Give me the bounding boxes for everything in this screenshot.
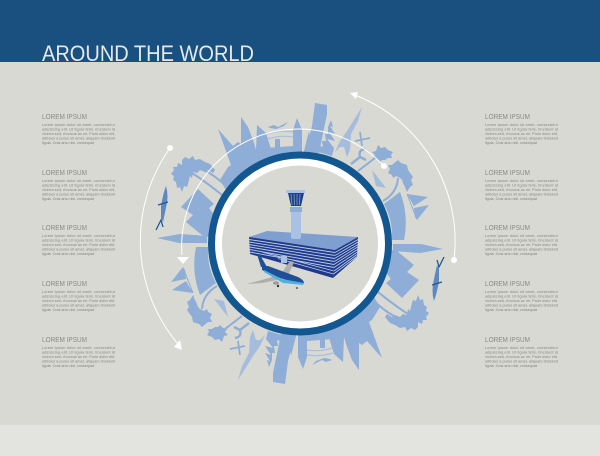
left text block 1: Lorem ipsum dolor sit amet, consectetur — [42, 123, 116, 127]
fuselage stripe — [264, 270, 304, 285]
left text block 4: ultricies a purus sit amet, aliquam tincidunt — [42, 304, 116, 308]
west needle tower — [157, 234, 207, 243]
spires — [218, 117, 273, 190]
left text block 3: adipiscing elit. Ut ligula felis, tincidunt id — [42, 238, 115, 242]
palm trees right — [372, 145, 413, 201]
right text block 2: adipiscing elit. Ut ligula felis, tincidunt id — [485, 184, 558, 188]
right text block 1: ultricies a purus sit amet, aliquam tincidunt — [485, 136, 559, 140]
right text block 2: Lorem ipsum dolor sit amet, consectetur — [485, 179, 559, 183]
right text block 4: ultricies a purus sit amet, aliquam tincidunt — [485, 304, 559, 308]
left text block 5: ultricies a purus sit amet, aliquam tincidunt — [42, 360, 116, 364]
right text block 1 — [485, 114, 559, 145]
airport terminal — [249, 190, 358, 278]
right text block 5: viverra sed, rhoncus ac mi. Proin dolor elit, — [485, 355, 558, 359]
fuselage — [262, 266, 304, 284]
small sailboat — [372, 170, 386, 188]
left text block 5: LOREM IPSUM — [42, 337, 87, 344]
nose gear — [296, 287, 298, 289]
left text block 1: viverra sed, rhoncus ac mi. Proin dolor elit, — [42, 132, 115, 136]
left text block 2: ultricies a purus sit amet, aliquam tincidunt — [42, 192, 116, 196]
right text block 5: ligula. Cras arcu nisl, consequat — [485, 364, 538, 368]
right text block 2: ligula. Cras arcu nisl, consequat — [485, 197, 538, 201]
eiffel tower — [335, 107, 362, 157]
left text block 3: Lorem ipsum dolor sit amet, consectetur — [42, 234, 116, 238]
right text block 3: viverra sed, rhoncus ac mi. Proin dolor elit, — [485, 243, 558, 247]
right text block 1: ligula. Cras arcu nisl, consequat — [485, 141, 538, 145]
control tower — [286, 190, 305, 239]
right text block 2: ultricies a purus sit amet, aliquam tincidunt — [485, 192, 559, 196]
small plane right — [432, 257, 444, 301]
left text block 4: Lorem ipsum dolor sit amet, consectetur — [42, 290, 116, 294]
spike tower — [303, 131, 312, 155]
left text block 1: ligula. Cras arcu nisl, consequat — [42, 141, 95, 145]
footer band — [0, 425, 600, 456]
windmill — [355, 132, 370, 146]
right text block 2: LOREM IPSUM — [485, 170, 530, 177]
right text block 5: LOREM IPSUM — [485, 337, 530, 344]
small plane left — [156, 186, 168, 230]
left text block 2: viverra sed, rhoncus ac mi. Proin dolor elit, — [42, 188, 115, 192]
landing gear — [277, 285, 279, 287]
pyramids — [181, 189, 222, 238]
near wing — [247, 276, 282, 284]
left text block 2 — [42, 170, 116, 201]
right text block 4 — [485, 281, 559, 312]
right text block 4: viverra sed, rhoncus ac mi. Proin dolor elit, — [485, 299, 558, 303]
right text block 3: LOREM IPSUM — [485, 225, 530, 232]
surfer — [351, 149, 375, 171]
right text block 3: ligula. Cras arcu nisl, consequat — [485, 252, 538, 256]
right text block 4: Lorem ipsum dolor sit amet, consectetur — [485, 290, 559, 294]
statue — [220, 161, 247, 194]
left text block 2: ligula. Cras arcu nisl, consequat — [42, 197, 95, 201]
tower bridge — [266, 118, 302, 160]
central badge — [208, 152, 392, 336]
left text block 1: adipiscing elit. Ut ligula felis, tincidunt id — [42, 128, 115, 132]
left text block 4: LOREM IPSUM — [42, 281, 87, 288]
sailboat — [407, 194, 429, 220]
airplane — [247, 254, 304, 289]
right text block 2: viverra sed, rhoncus ac mi. Proin dolor elit, — [485, 188, 558, 192]
left text block 2: LOREM IPSUM — [42, 170, 87, 177]
left text block 3: LOREM IPSUM — [42, 225, 87, 232]
left text block 2: adipiscing elit. Ut ligula felis, tincidunt id — [42, 184, 115, 188]
arrow: outer right arc — [350, 92, 457, 263]
right text block 5: Lorem ipsum dolor sit amet, consectetur — [485, 346, 559, 350]
terminal right facade — [333, 237, 358, 278]
landmark ring: skyline silhouettes — [157, 103, 443, 384]
left text block 5: ligula. Cras arcu nisl, consequat — [42, 364, 95, 368]
pagoda — [318, 120, 335, 156]
terminal roof — [249, 231, 358, 250]
right text block 1: viverra sed, rhoncus ac mi. Proin dolor elit, — [485, 132, 558, 136]
terminal left facade — [249, 237, 335, 278]
right text block 1: adipiscing elit. Ut ligula felis, tincidunt id — [485, 128, 558, 132]
skyscraper — [305, 103, 327, 153]
arrow: inner arc over the top — [177, 129, 387, 264]
left text block 3: ligula. Cras arcu nisl, consequat — [42, 252, 95, 256]
right text block 3: ultricies a purus sit amet, aliquam tincidunt — [485, 248, 559, 252]
right text block 5: adipiscing elit. Ut ligula felis, tincidunt id — [485, 350, 558, 354]
left text block 5: viverra sed, rhoncus ac mi. Proin dolor elit, — [42, 355, 115, 359]
right text block 4: ligula. Cras arcu nisl, consequat — [485, 308, 538, 312]
right text block 2 — [485, 170, 559, 201]
right text block 5 — [485, 337, 559, 368]
right text block 3: Lorem ipsum dolor sit amet, consectetur — [485, 234, 559, 238]
left text block 3: viverra sed, rhoncus ac mi. Proin dolor elit, — [42, 243, 115, 247]
left text block 5: adipiscing elit. Ut ligula felis, tincidunt id — [42, 350, 115, 354]
landmarks: upper half — [157, 103, 429, 243]
right text block 4: adipiscing elit. Ut ligula felis, tincidunt id — [485, 294, 558, 298]
right text block 1: Lorem ipsum dolor sit amet, consectetur — [485, 123, 559, 127]
birds — [268, 122, 288, 129]
right text block 5: ultricies a purus sit amet, aliquam tincidunt — [485, 360, 559, 364]
title: AROUND THE WORLD — [42, 41, 254, 66]
far wing — [281, 261, 294, 276]
palm trees left — [171, 156, 228, 195]
left text block 4 — [42, 281, 116, 312]
left text block 4: viverra sed, rhoncus ac mi. Proin dolor elit, — [42, 299, 115, 303]
landmarks: lower half — [171, 244, 443, 384]
opera house — [384, 192, 406, 240]
left text block 1: ultricies a purus sit amet, aliquam tincidunt — [42, 136, 116, 140]
doorway — [281, 256, 287, 263]
engine — [273, 281, 279, 285]
right text block 1: LOREM IPSUM — [485, 114, 530, 121]
left text block 3 — [42, 225, 116, 256]
tail fin — [257, 254, 267, 267]
right text block 3 — [485, 225, 559, 256]
arrow: outer left arc — [140, 145, 182, 350]
right text block 4: LOREM IPSUM — [485, 281, 530, 288]
header band — [0, 0, 600, 62]
right text block 3: adipiscing elit. Ut ligula felis, tincidunt id — [485, 238, 558, 242]
left text block 1 — [42, 114, 116, 145]
left text block 2: Lorem ipsum dolor sit amet, consectetur — [42, 179, 116, 183]
left text block 5: Lorem ipsum dolor sit amet, consectetur — [42, 346, 116, 350]
left text block 5 — [42, 337, 116, 368]
left text block 4: ligula. Cras arcu nisl, consequat — [42, 308, 95, 312]
left text block 4: adipiscing elit. Ut ligula felis, tincidunt id — [42, 294, 115, 298]
left text block 3: ultricies a purus sit amet, aliquam tincidunt — [42, 248, 116, 252]
left text block 1: LOREM IPSUM — [42, 114, 87, 121]
